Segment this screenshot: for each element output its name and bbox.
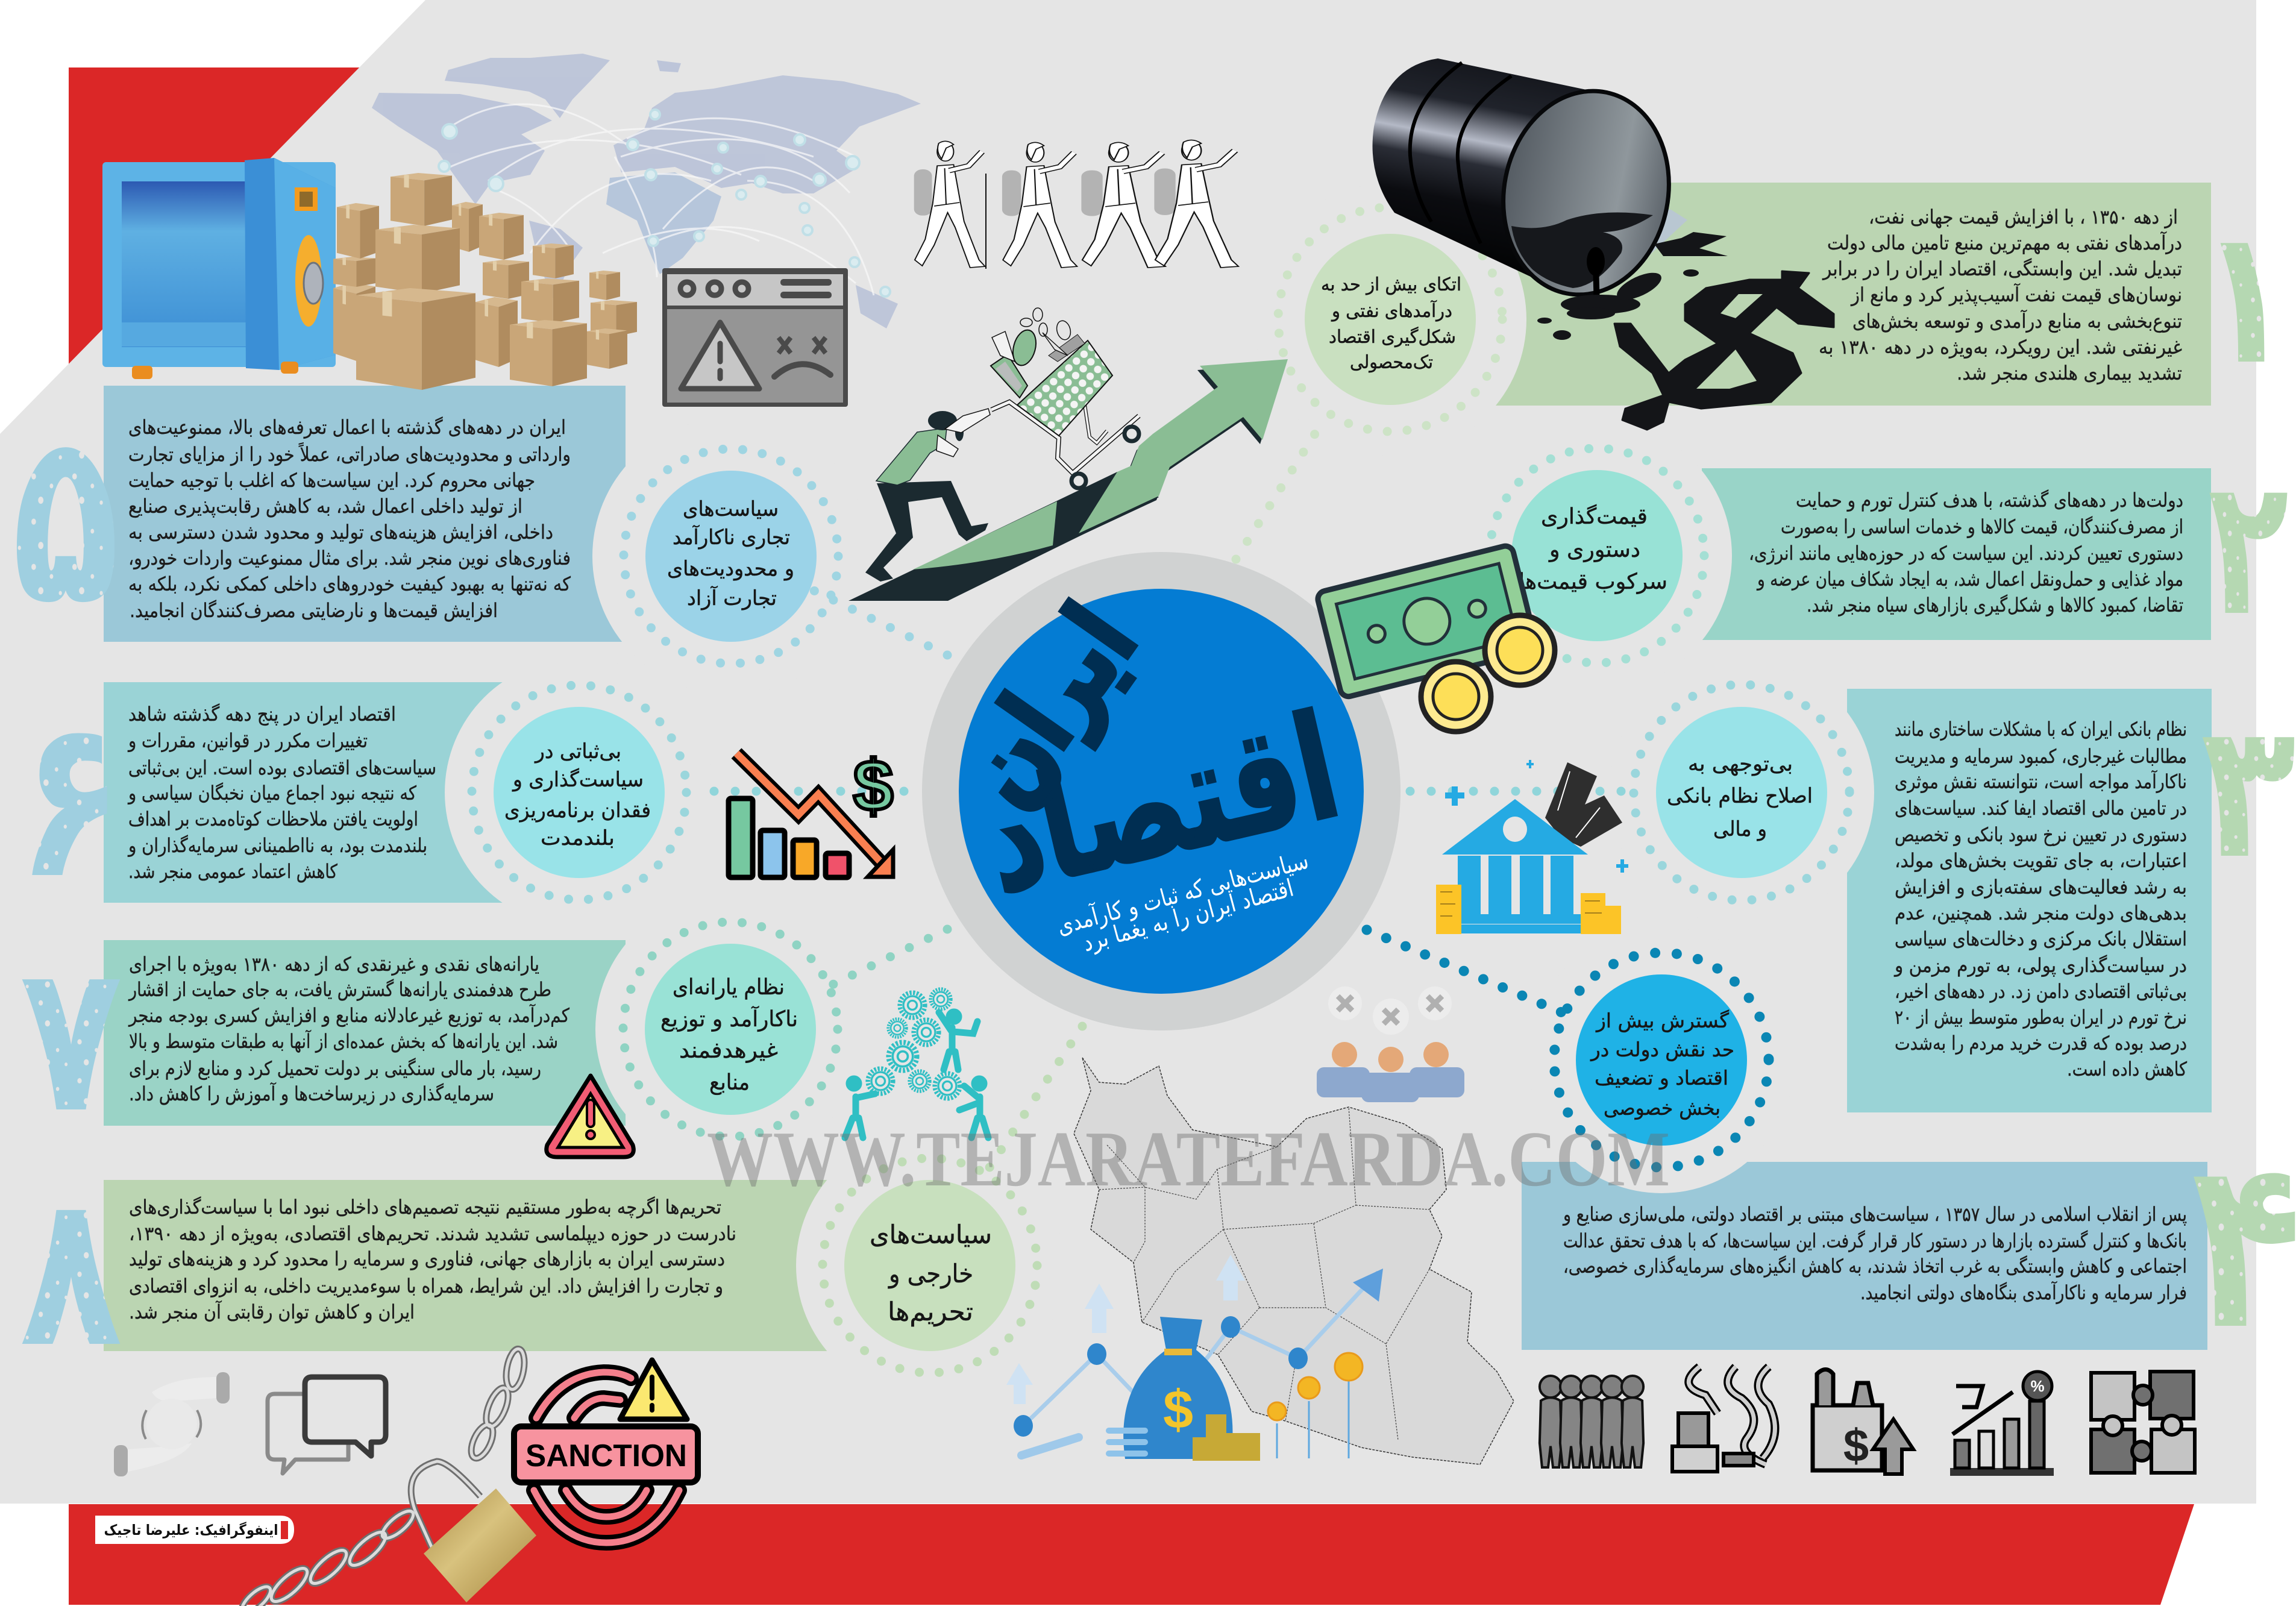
circle: instability heading: بلندمدت [541,826,615,850]
text block: panel 5: افزایش قیمت‌ها و نارضایتی مصرف‌کنندگان انجامید. [130,599,498,622]
text block: panel 3: بی‌ثباتی اقتصادی دامن زد. در دهه‌های اخیر، [1895,980,2187,1003]
illustration: banknote and coins [1316,544,1555,732]
text block: panel 4: پس از انقلاب اسلامی در سال ۱۳۵۷ ، سیاست‌های مبتنی بر اقتصاد دولتی، ملی‌سازی صنایع و [1562,1203,2187,1226]
panel: 6 policy instability [104,658,714,927]
red corner backdrop top-left [69,67,430,441]
text block: panel 5: ایران در دهه‌های گذشته با اعمال تعرفه‌های بالا، ممنوعیت‌های [128,416,566,439]
circle: trade policy heading: تجارت آزاد [687,586,777,610]
circle: instability heading: سیاست‌گذاری و [512,768,644,792]
text block: panel 5: جهانی محروم کرد. این سیاست‌ها که اغلب با توجیه حمایت [128,469,535,492]
icon: bank with cash and documents [1436,760,1628,934]
text block: panel 8: تحریم‌ها اگرچه به‌طور مستقیم نتیجه تصمیم‌های داخلی نبود اما با سیاست‌گذاری‌های [129,1196,721,1219]
circle: trade policy heading: و محدودیت‌های [667,557,794,581]
text block: panel 7: شد. این یارانه‌ها که بخش عمده‌ای از آنها به طبقات متوسط و بالا [129,1029,558,1053]
circle: trade policy heading: سیاست‌های [683,497,779,521]
text block: panel 5: که نه‌تنها به بهبود کیفیت خودروهای داخلی کمکی نکرد، بلکه به [128,572,571,595]
world map illustration [372,54,921,328]
circle: price controls heading: قیمت‌گذاری [1541,504,1648,529]
text block: panel 3: دستوری در تعیین نرخ سود بانکی و تخصیص [1895,823,2187,846]
circle: sanctions heading: سیاست‌های [870,1220,992,1249]
icon: team of people [1540,1376,1643,1467]
large panel numerals [11,189,2296,1394]
text block: panel 3: مطالبات غیرجاری، کمبود سرمایه و مدیریت [1895,745,2187,768]
large panel numerals: ۱ [2200,189,2291,406]
large panel numerals: ۸ [20,1148,122,1394]
text block: panel 2: تقاضا، کمبود کالاها و شکل‌گیری بازارهای سیاه منجر شد. [1807,594,2183,616]
icon: sanction badge [514,1360,698,1543]
illustration: four walkers [914,140,1238,269]
text block: panel 7: سرمایه‌گذاری در زیرساخت‌ها و آموزش را کاهش داد. [129,1082,494,1105]
circle: sanctions heading: تحریم‌ها [888,1297,973,1327]
text block: panel 2: مواد غذایی و حمل‌ونقل اعمال شد، به ایجاد شکاف میان عرضه و [1756,568,2183,591]
illustration: oil splash dollar sign [1537,232,1834,430]
circle: banking reform heading: بی‌توجهی به [1688,752,1793,776]
icon: sanction badge: SANCTION [525,1438,687,1473]
circle: subsidies heading: غیرهدفمند [679,1038,778,1063]
text block: panel 7: کم‌درآمد، به توزیع غیرعادلانه منابع و افزایش کسری بودجه منجر [128,1003,570,1027]
text block: panel 1: درآمدهای نفتی به مهم‌ترین منبع تامین مالی دولت [1827,231,2182,254]
text block: panel 6: سیاست‌های اقتصادی بوده است. این بی‌ثباتی [128,756,436,779]
illustration: blue safe [102,158,336,379]
central title disc [922,552,1400,1030]
circle: state expansion heading: گسترش بیش از [1595,1009,1729,1032]
text block: panel 3: در سیاست‌گذاری پولی، به تورم مزمن و [1893,954,2187,977]
text block: panel 7: رسید، بار مالی سنگینی بر دولت تحمیل کرد و منابع لازم برای [129,1057,541,1080]
illustration: money bag and growth chart: $ [1163,1380,1193,1440]
circle: sanctions heading [844,1180,1015,1351]
text block: panel 5: وارداتی و محدودیت‌های صادراتی، عملاً خود را از مزایای تجارت [128,442,571,466]
subtitle: اقتصاد ایران را به یغما برد [1080,874,1296,957]
text block: panel 1: نوسان‌های قیمت نفت آسیب‌پذیر کرد و مانع از [1850,283,2182,306]
large panel numerals: ۷ [20,920,122,1158]
icon: browser error window [662,268,848,407]
red footer band [69,1504,2194,1605]
circle: price controls heading [1511,470,1683,641]
text block: panel 8: و تجارت را افزایش داد. این شرایط، همراه با سوءمدیریت داخلی، به انزوای اقتصادی [129,1275,723,1297]
circle: price controls heading: سرکوب قیمت‌ها [1519,569,1667,594]
circle: instability heading: فقدان برنامه‌ریزی [504,798,651,823]
large panel numerals: ۶ [17,671,124,927]
text block: panel 6: بلندمدت بود، به نااطمینانی سرمایه‌گذاران و [127,834,427,857]
text block: panel 6: کاهش اعتماد عمومی منجر شد. [128,860,338,883]
title word: Iran: ایران [939,584,1161,827]
circle: subsidies heading: ناکارآمد و توزیع [660,1005,798,1032]
text block: panel 1: تشدید بیماری هلندی منجر شد. [1957,362,2182,384]
text block: panel 3: در تامین مالی اقتصاد ایفا کند. سیاست‌های [1895,797,2187,820]
illustration: cardboard boxes [333,173,637,390]
circle: oil dependence heading: شکل‌گیری اقتصاد [1329,327,1456,348]
icon: falling bar chart with dollar: $ [853,745,893,826]
text block: panel 4 [1562,1203,2187,1304]
panel: 4 state expansion [1522,927,2207,1350]
text block: panel 8: نادرست در حوزه دیپلماسی تشدید شدند. تحریم‌های اقتصادی، به‌ویژه از دهه ۱۳۹۰، [129,1222,736,1245]
icon: shopping bag with rising price: $ [1843,1420,1869,1472]
text block: panel 1: تنوع‌بخشی به منابع درآمدی و توسعه بخش‌های [1852,309,2182,333]
credit label [95,1516,294,1544]
circle: state expansion heading [1576,974,1747,1146]
panel: 8 sanctions [104,1132,1064,1399]
text block: panel 6 [127,703,436,883]
icon: cart, bars and discount: % [2030,1377,2045,1395]
icon: three people with crosses [1317,986,1464,1102]
circle: trade policy heading [645,471,817,642]
text block: panel 3: کاهش داده است. [2067,1058,2188,1081]
panel: 7 subsidies [104,894,865,1164]
circle: oil dependence heading: تک‌محصولی [1350,352,1433,373]
text block: panel 3 [1893,718,2188,1081]
illustration: map of Iran [1074,1058,1514,1464]
text block: panel 3: اعتبارات، به جای تقویت بخش‌های مولد، [1895,849,2187,872]
panel: 5 trade policy [104,386,870,695]
credit label: اینفوگرافیک: علیرضا تاجیک [104,1522,278,1539]
text block: panel 3: درصد بوده که قدرت خرید مردم را به‌شدت [1895,1032,2187,1055]
icon: shopping bag with rising price [1813,1369,1913,1474]
text block: panel 8: ایران و کاهش توان رقابتی آن منجر شد. [129,1300,415,1323]
text block: panel 6: که نتیجه نبود اجماع میان نخبگان سیاسی و [127,782,417,805]
text block: panel 2 [1749,489,2183,616]
illustration: man pushing cart up arrow [848,308,1288,601]
text block: panel 3: ناکارآمد مواجه است، نتوانسته نقش موثری [1895,770,2187,793]
text block: panel 7: یارانه‌های نقدی و غیرنقدی که از دهه ۱۳۸۰ به‌ویژه با اجرای [129,953,539,976]
text block: panel 3: بدهی‌های دولت منجر شد. همچنین، عدم [1895,902,2187,924]
circle: instability heading [494,707,665,878]
circle: banking reform heading [1656,707,1827,878]
circle: instability heading: بی‌ثباتی در [534,739,621,764]
text block: panel 8 [129,1196,736,1323]
text block: panel 7 [128,953,570,1105]
text block: panel 3: به رشد فعالیت‌های سفته‌بازی و افزایش [1895,876,2187,899]
subtitle: سیاست‌هایی که ثبات و کارآمدی [1053,845,1311,940]
text block: panel 3: استقلال بانک مرکزی و دخالت‌های سیاسی [1895,927,2187,950]
text block: panel 3: نرخ تورم در ایران به‌طور متوسط بیش از ۲۰ [1895,1006,2187,1029]
text block: panel 5: فناوری‌های نوین منجر شد. برای مثال ممنوعیت واردات خودرو، [128,547,571,569]
dotted connectors from centre to topics [714,429,1627,1174]
large panel numerals: ۳ [2201,683,2296,900]
icon: polluting factory [1672,1367,1775,1472]
text block: panel 4: فرار سرمایه و ناکارآمدی بنگاه‌های دولتی انجامید. [1860,1281,2187,1304]
circle: state expansion heading: اقتصاد و تضعیف [1595,1066,1728,1090]
circle: oil dependence heading: اتکای بیش از حد به [1321,274,1461,295]
title word: economy: اقتصاد [968,682,1353,926]
large panel numerals: ۵ [11,380,120,657]
circle: oil dependence heading [1305,234,1476,405]
text block: panel 4: اجتماعی و کاهش وابستگی به غرب اتخاذ شدند، به کاهش انگیزه‌های سرمایه‌گذاری خصوصی، [1563,1255,2187,1278]
icon: puzzle pieces [2091,1372,2195,1473]
text block: panel 6: اولویت یافتن ملاحظات کوتاه‌مدت بر اهداف [128,808,418,830]
circle: trade policy heading: تجاری ناکارآمد [673,525,790,550]
circle: banking reform heading: و مالی [1713,817,1767,841]
text block: panel 1: تبدیل شد. این وابستگی، اقتصاد ایران را در برابر [1822,257,2182,280]
text block: panel 6: تغییرات مکرر در قوانین، مقررات و [127,729,368,752]
circle: banking reform heading: اصلاح نظام بانکی [1667,784,1813,808]
icon: falling bar chart with dollar [729,745,893,877]
illustration: people turning gears [845,989,988,1138]
icon: speech bubbles [268,1377,386,1473]
text block: panel 1: غیرنفتی شد. این رویکرد، به‌ویژه در دهه ۱۳۸۰ به [1819,336,2182,359]
circle: sanctions heading: خارجی و [888,1259,973,1288]
text block: panel 5 [128,416,571,622]
panel: 1 oil dependence [1254,183,2211,456]
text block: panel 2: دولت‌ها در دهه‌های گذشته، با هدف کنترل تورم و حمایت [1796,489,2183,512]
illustration: chain and padlock [238,1347,536,1606]
circle: subsidies heading: منابع [709,1070,750,1095]
text block: panel 1 [1819,205,2182,384]
text block: panel 2: از مصرف‌کنندگان، قیمت کالاها و خدمات اساسی را به‌صورت [1781,515,2183,538]
subtitle [1053,845,1311,957]
text block: panel 5: از تولید داخلی اعمال شد، به کاهش رقابت‌پذیری صنایع [128,495,522,518]
circle: subsidies heading: نظام یارانه‌ای [673,975,785,1000]
text block: panel 8: دسترسی ایران به بازارهای جهانی، فناوری و سرمایه را محدود کرد و هزینه‌های تولید [129,1247,725,1270]
illustration: oil barrel [1373,58,1687,309]
text block: panel 7: طرح هدفمندی یارانه‌ها گسترش یافت، به جای حمایت از اقشار [128,978,551,1001]
icon: warning triangle [547,1076,633,1157]
panel: 2 price controls [1462,421,2211,691]
panel: 3 banking reform [1609,660,2212,1112]
illustration: money bag and growth chart [1006,1255,1383,1461]
icon: faint handshake with gear [114,1372,230,1476]
circle: subsidies heading [645,944,816,1115]
circle: oil dependence heading: درآمدهای نفتی و [1331,300,1452,322]
text block: panel 6: اقتصاد ایران در پنج دهه گذشته شاهد [128,703,396,726]
text block: panel 5: داخلی، افزایش هزینه‌های تولید و محدود شدن دسترسی به [128,521,553,544]
large panel numerals: ۲ [2208,437,2289,657]
text block: panel 3: نظام بانکی ایران که با مشکلات ساختاری مانند [1895,718,2187,741]
text block: panel 2: دستوری تعیین کردند. این سیاست که در حوزه‌هایی مانند انرژی، [1749,542,2183,565]
icon: cart, bars and discount [1950,1372,2054,1476]
watermark: WWW.TEJARATEFARDA.COM [707,1115,1670,1203]
circle: state expansion heading: بخش خصوصی [1604,1096,1720,1120]
circle: price controls heading: دستوری و [1548,538,1640,562]
circle: state expansion heading: حد نقش دولت در [1590,1038,1734,1061]
text block: panel 1: از دهه ۱۳۵۰ ، با افزایش قیمت جهانی نفت، [1869,205,2178,228]
